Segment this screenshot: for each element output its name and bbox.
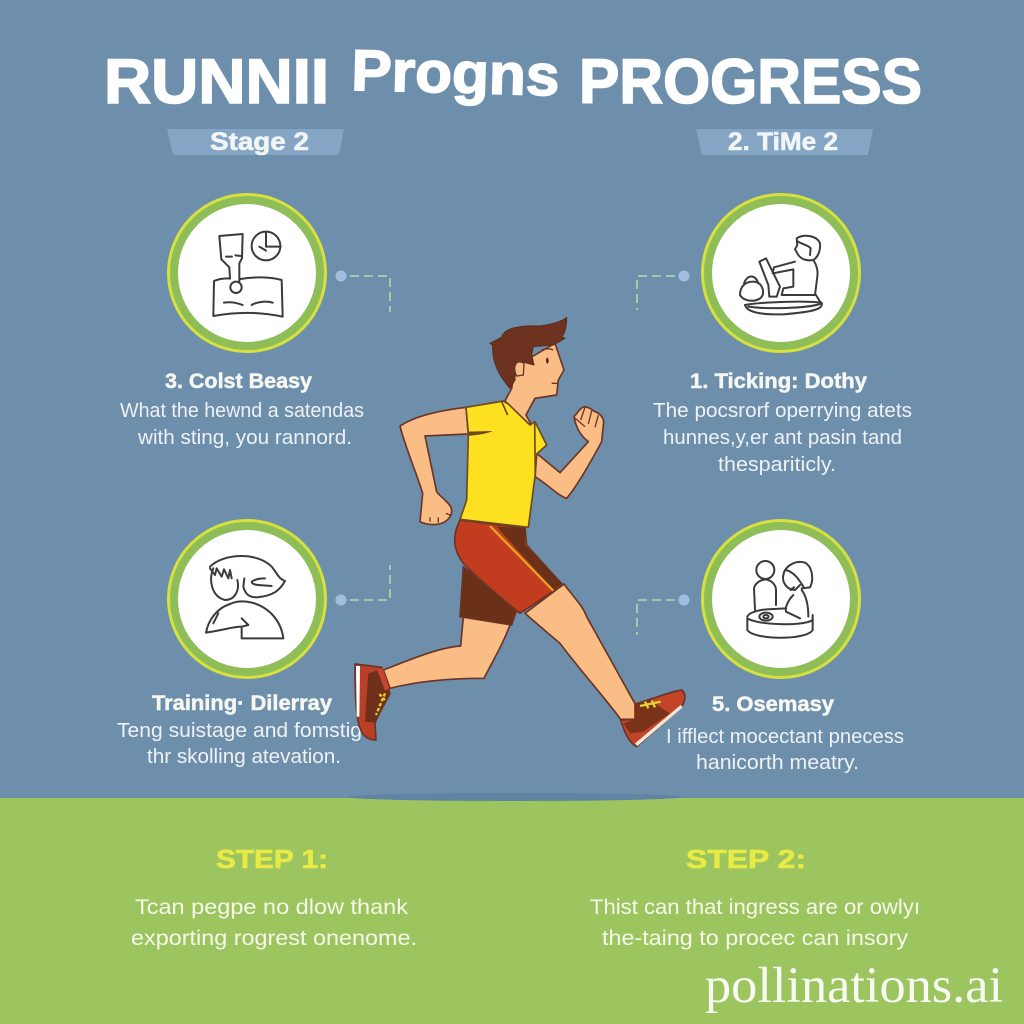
panel: top right stage [637, 194, 912, 476]
connector [637, 270, 690, 310]
shorts [455, 520, 563, 625]
text block: thespariticly. [718, 454, 836, 476]
banner: Stage 2: Stage 2 [210, 128, 309, 156]
text block: What the hewnd a satendas [120, 400, 364, 422]
text block: Teng suistage and fomstig [117, 720, 362, 742]
front leg [525, 584, 685, 747]
text block: hanicorth meatry. [696, 752, 859, 774]
ground panel [0, 793, 1024, 1024]
runner figure [355, 317, 685, 747]
icon: two people at table badge [702, 520, 860, 678]
connector [637, 594, 690, 635]
icon: person at desk badge [702, 194, 860, 352]
icon: person with long hair badge [168, 520, 326, 678]
heading: 3. Colst Beasy [165, 370, 312, 393]
title [104, 38, 922, 117]
step 2 [590, 844, 920, 950]
watermark: pollinations.ai [705, 958, 1003, 1014]
step text: Tcan pegpe no dlow thank [135, 896, 409, 919]
front arm [535, 407, 604, 498]
step text: Thist can that ingress are or owlyı [590, 896, 920, 919]
text block: The pocsrorf operrying atets [653, 400, 912, 422]
text block: with sting, you rannord. [137, 427, 352, 449]
step text [131, 896, 417, 950]
banner: Time 2 [696, 128, 873, 156]
shirt [460, 401, 547, 527]
text block [120, 400, 364, 449]
head [490, 317, 567, 425]
icon: book and clock badge [168, 194, 326, 352]
text block: I ifflect mocectant pnecess [666, 726, 904, 748]
step heading: STEP 1: [216, 844, 328, 874]
step heading: STEP 2: [686, 844, 806, 874]
banner: Time 2: 2. TiMe 2 [728, 128, 838, 156]
step text: exporting rogrest onenome. [131, 927, 417, 950]
panel: lower left stage [117, 520, 390, 768]
step text [590, 896, 920, 950]
back leg [355, 617, 511, 740]
text block [117, 720, 362, 768]
heading: Training· Dilerray [152, 692, 332, 715]
title: PROGRESS [579, 47, 922, 117]
heading: 5. Osemasy [712, 693, 834, 716]
connector [336, 270, 390, 312]
step 1 [131, 844, 417, 950]
text block [666, 726, 904, 774]
banner: Stage 2 [167, 128, 344, 156]
text block [653, 400, 912, 476]
text block: thr skolling atevation. [147, 746, 341, 768]
text block: hunnes,y,er ant pasin tand [663, 427, 902, 449]
back arm [400, 407, 468, 525]
title: Progns [351, 38, 560, 108]
background [0, 0, 1024, 798]
title: RUNNII [104, 47, 329, 117]
step text: the-taing to procec can insory [602, 927, 909, 950]
panel: lower right stage [637, 520, 904, 774]
connector [336, 565, 390, 606]
heading: 1. Ticking: Dothy [690, 370, 867, 393]
panel: top left stage [120, 194, 390, 449]
